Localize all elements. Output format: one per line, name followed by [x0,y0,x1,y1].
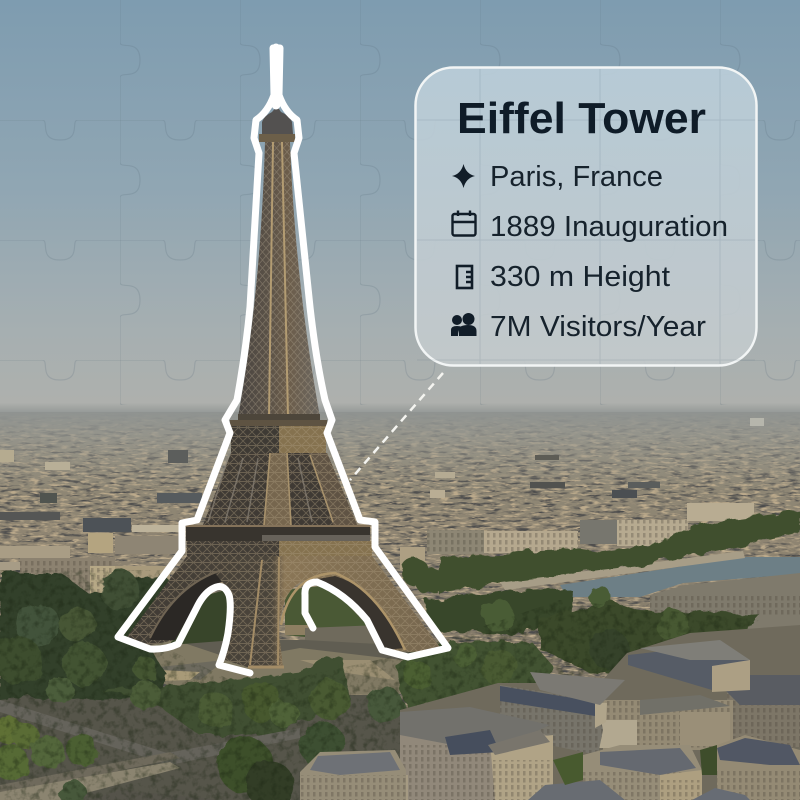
building D [593,695,733,750]
height text: 330 m Height [490,261,670,293]
building C [628,640,750,692]
tower first platform [186,525,372,557]
building G [725,675,800,747]
background: right bank buildings behind [650,573,800,650]
city landmarks: left [0,450,202,558]
icon: height door [457,266,472,288]
tower upper shaft [238,142,320,417]
location text: Paris, France [490,161,663,193]
tree gaps [553,752,583,785]
card faint puzzle lines [417,69,755,364]
Eiffel Tower cut-out [118,48,448,673]
visitors text: 7M Visitors/Year [490,311,706,343]
background: right bank trees and river [401,510,800,597]
front roofs [528,780,625,800]
building at bottom centre [300,750,406,800]
inauguration text: 1889 Inauguration [490,211,728,243]
building E [583,745,702,800]
background: foreground trees [0,716,345,800]
background: park trees [0,570,403,735]
row: visitors [451,311,706,343]
title: Eiffel Tower [457,94,706,143]
background: tree texture [0,570,800,800]
tower top dome [262,106,293,134]
info card [416,68,756,366]
row: inauguration [452,210,728,243]
icon: calendar [452,210,476,236]
background: city of Paris [0,412,800,800]
background: ground around the tower base [120,585,510,695]
building B [500,672,625,755]
tower white sticker outline [118,48,448,673]
tower upper platform [259,134,295,142]
background: right bank tree masses [395,586,760,705]
background: Haussmann buildings, lower right [300,625,800,800]
tower legs and arches [127,556,442,667]
dashed callout line [350,373,443,480]
icon: location star [452,164,475,188]
tower middle section [203,453,357,525]
tower second platform [230,414,327,454]
city landmarks: right [400,418,764,570]
background: sky [0,0,800,415]
icon: people [451,313,476,336]
background: road area base [0,695,400,800]
building by the left park [0,558,170,596]
row: height [457,261,670,293]
row: location [452,161,663,193]
building F [717,735,800,800]
background: road and bridge [0,700,300,800]
card panel [416,68,756,366]
building A [400,707,553,800]
